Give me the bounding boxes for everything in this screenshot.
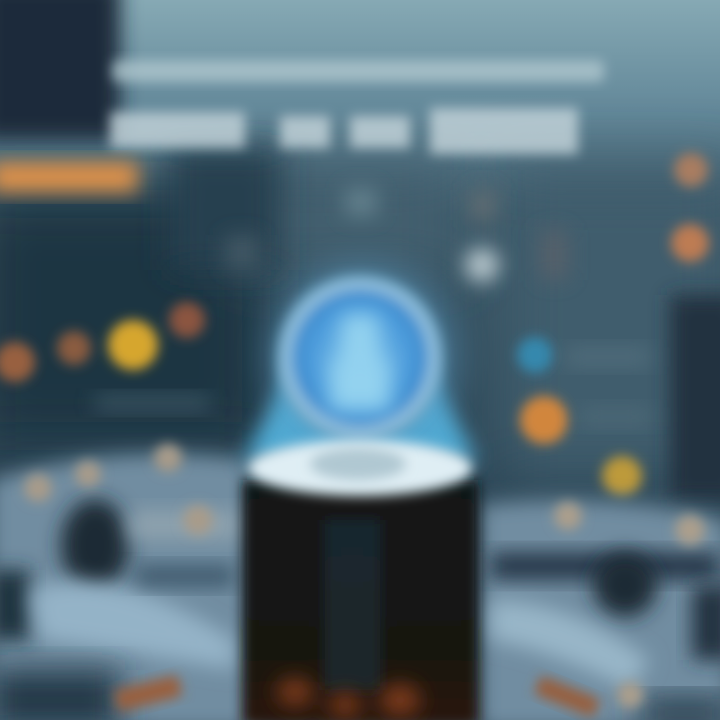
embers at cylinder base	[277, 678, 420, 717]
bottom platforms left	[0, 444, 250, 720]
markers right column	[517, 337, 650, 496]
title: first line	[112, 60, 604, 82]
orange markers right	[671, 153, 709, 262]
orange label banner	[0, 162, 138, 192]
bottom platforms right	[480, 500, 720, 720]
dark tower right	[670, 295, 720, 500]
glow cone beneath orb	[242, 360, 478, 462]
title: second line	[110, 108, 578, 154]
cylinder body	[243, 480, 478, 720]
markers left row	[0, 302, 205, 382]
left caption	[95, 395, 210, 411]
lock glyph in orb	[330, 315, 390, 410]
small icons: top centre row	[225, 188, 568, 282]
cylinder top disc	[248, 440, 472, 496]
central orb icon	[266, 262, 458, 454]
dark tower top left	[0, 0, 120, 140]
